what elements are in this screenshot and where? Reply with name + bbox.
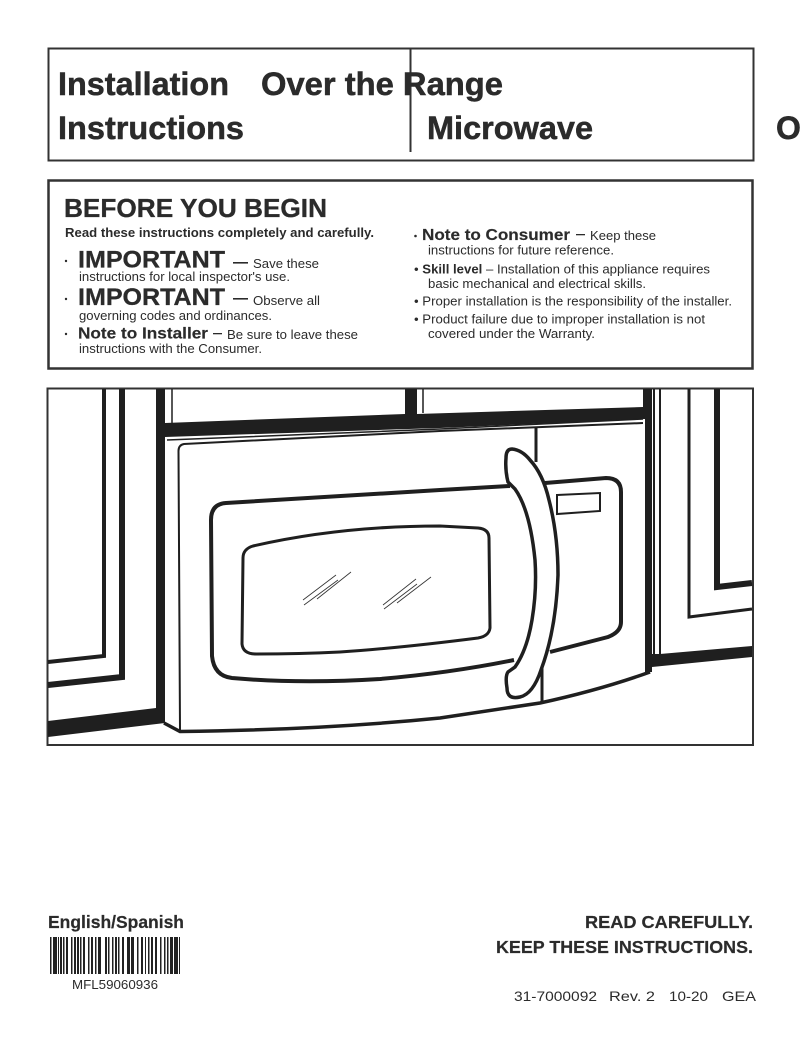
title panel: Instructions xyxy=(58,110,244,146)
left column text xyxy=(65,226,374,356)
display window xyxy=(557,493,600,514)
left column text: Read these instructions completely and carefully. xyxy=(65,226,374,240)
left column text: governing codes and ordinances. xyxy=(79,309,272,323)
document number: 31-7000092 xyxy=(514,988,597,1004)
left column text: instructions for local inspector's use. xyxy=(79,270,290,284)
right column text: Note to Consumer xyxy=(422,227,570,244)
heading: before you begin: BEFORE YOU BEGIN xyxy=(64,195,327,223)
right column text: • Proper installation is the responsibility of the installer. xyxy=(414,294,732,308)
illustration: microwave between cabinets xyxy=(48,388,753,745)
barcode number: MFL59060936 xyxy=(72,977,158,992)
right column text: covered under the Warranty. xyxy=(428,327,595,341)
title panel: Over the Range xyxy=(261,66,503,102)
right column text xyxy=(414,227,732,341)
microwave body xyxy=(164,419,650,732)
keep instructions note xyxy=(496,912,753,957)
right column text: instructions for future reference. xyxy=(428,244,614,258)
left column text: Be sure to leave these xyxy=(227,328,358,342)
door handle xyxy=(506,449,558,698)
left column text: IMPORTANT xyxy=(78,284,225,311)
document number xyxy=(514,988,757,1004)
title panel xyxy=(48,48,801,160)
left column text: Note to Installer xyxy=(78,326,208,342)
right column text: Keep these xyxy=(590,229,656,243)
title panel: Installation xyxy=(58,66,229,102)
document number: GEA xyxy=(722,988,757,1004)
left column text: instructions with the Consumer. xyxy=(79,342,262,356)
barcode xyxy=(50,937,180,974)
right column text: basic mechanical and electrical skills. xyxy=(428,277,646,291)
left column text: Observe all xyxy=(253,294,320,308)
glass glare marks xyxy=(303,572,431,609)
right column text: • Product failure due to improper installation is not xyxy=(414,312,706,326)
door frame xyxy=(211,478,621,681)
door window xyxy=(242,526,490,654)
title panel: Microwave xyxy=(427,110,593,146)
document number: 10-20 xyxy=(669,988,708,1004)
panel: before you begin xyxy=(48,180,752,368)
document number: Rev. 2 xyxy=(609,988,655,1004)
language label: English/Spanish xyxy=(48,912,184,932)
keep instructions note: READ CAREFULLY. xyxy=(585,912,753,932)
right column text: • Skill level – Installation of this appliance requires xyxy=(414,262,710,276)
right cabinet xyxy=(652,389,752,667)
keep instructions note: KEEP THESE INSTRUCTIONS. xyxy=(496,937,753,957)
left column text: Save these xyxy=(253,257,319,271)
left column text: IMPORTANT xyxy=(78,246,225,274)
left cabinet xyxy=(48,389,652,737)
title panel: O xyxy=(776,110,801,146)
